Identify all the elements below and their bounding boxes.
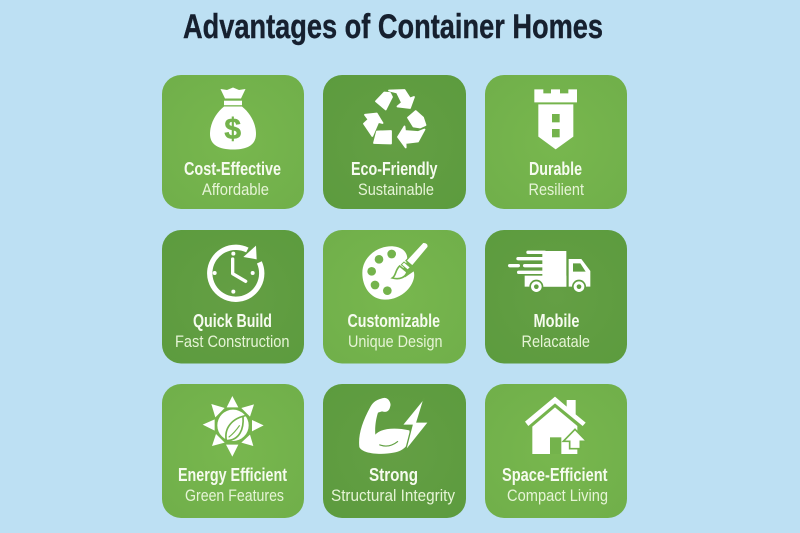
panel: quick build <box>162 230 304 364</box>
panel: customizable <box>323 230 466 364</box>
label: durable: Durable <box>529 159 582 179</box>
sublabel: resilient: Resilient <box>528 180 584 199</box>
panel: cost-effective <box>162 75 304 209</box>
icon: flexed arm and lightning bolt <box>359 398 429 454</box>
icon: sun with leaf <box>203 396 264 457</box>
title: Advantages of Container Homes <box>183 8 603 46</box>
icon: recycle arrows <box>364 90 426 148</box>
panel: durable <box>485 75 627 209</box>
sublabel: relacatale: Relacatale <box>522 332 590 351</box>
icon: house with up arrow <box>525 397 587 454</box>
sublabel: unique design: Unique Design <box>348 332 442 351</box>
icon: paint palette and brush <box>362 242 428 300</box>
icon: moving truck <box>508 251 590 294</box>
sublabel: sustainable: Sustainable <box>358 180 434 199</box>
sublabel: green features: Green Features <box>185 486 284 505</box>
panel: eco-friendly <box>323 75 466 209</box>
label: strong: Strong <box>369 465 418 485</box>
label: space-efficient: Space-Efficient <box>502 465 608 485</box>
panel: space-efficient <box>485 384 627 518</box>
icon: clock with arrow <box>210 246 262 299</box>
label: eco-friendly: Eco-Friendly <box>351 159 438 179</box>
sublabel: affordable: Affordable <box>202 180 269 199</box>
icon: castle tower shield <box>534 89 577 149</box>
label: energy efficient: Energy Efficient <box>178 465 287 485</box>
label: customizable: Customizable <box>348 311 440 331</box>
icon: money bag <box>210 88 256 150</box>
sublabel: structural integrity: Structural Integrity <box>331 486 455 505</box>
label: mobile: Mobile <box>534 311 580 331</box>
label: cost-effective: Cost-Effective <box>184 159 281 179</box>
panel: energy efficient <box>162 384 304 518</box>
panel: mobile <box>485 230 627 364</box>
panel: strong <box>323 384 466 518</box>
icon: money bag: $ <box>224 113 241 146</box>
label: quick build: Quick Build <box>193 311 272 331</box>
sublabel: fast construction: Fast Construction <box>175 332 290 351</box>
sublabel: compact living: Compact Living <box>507 486 608 505</box>
